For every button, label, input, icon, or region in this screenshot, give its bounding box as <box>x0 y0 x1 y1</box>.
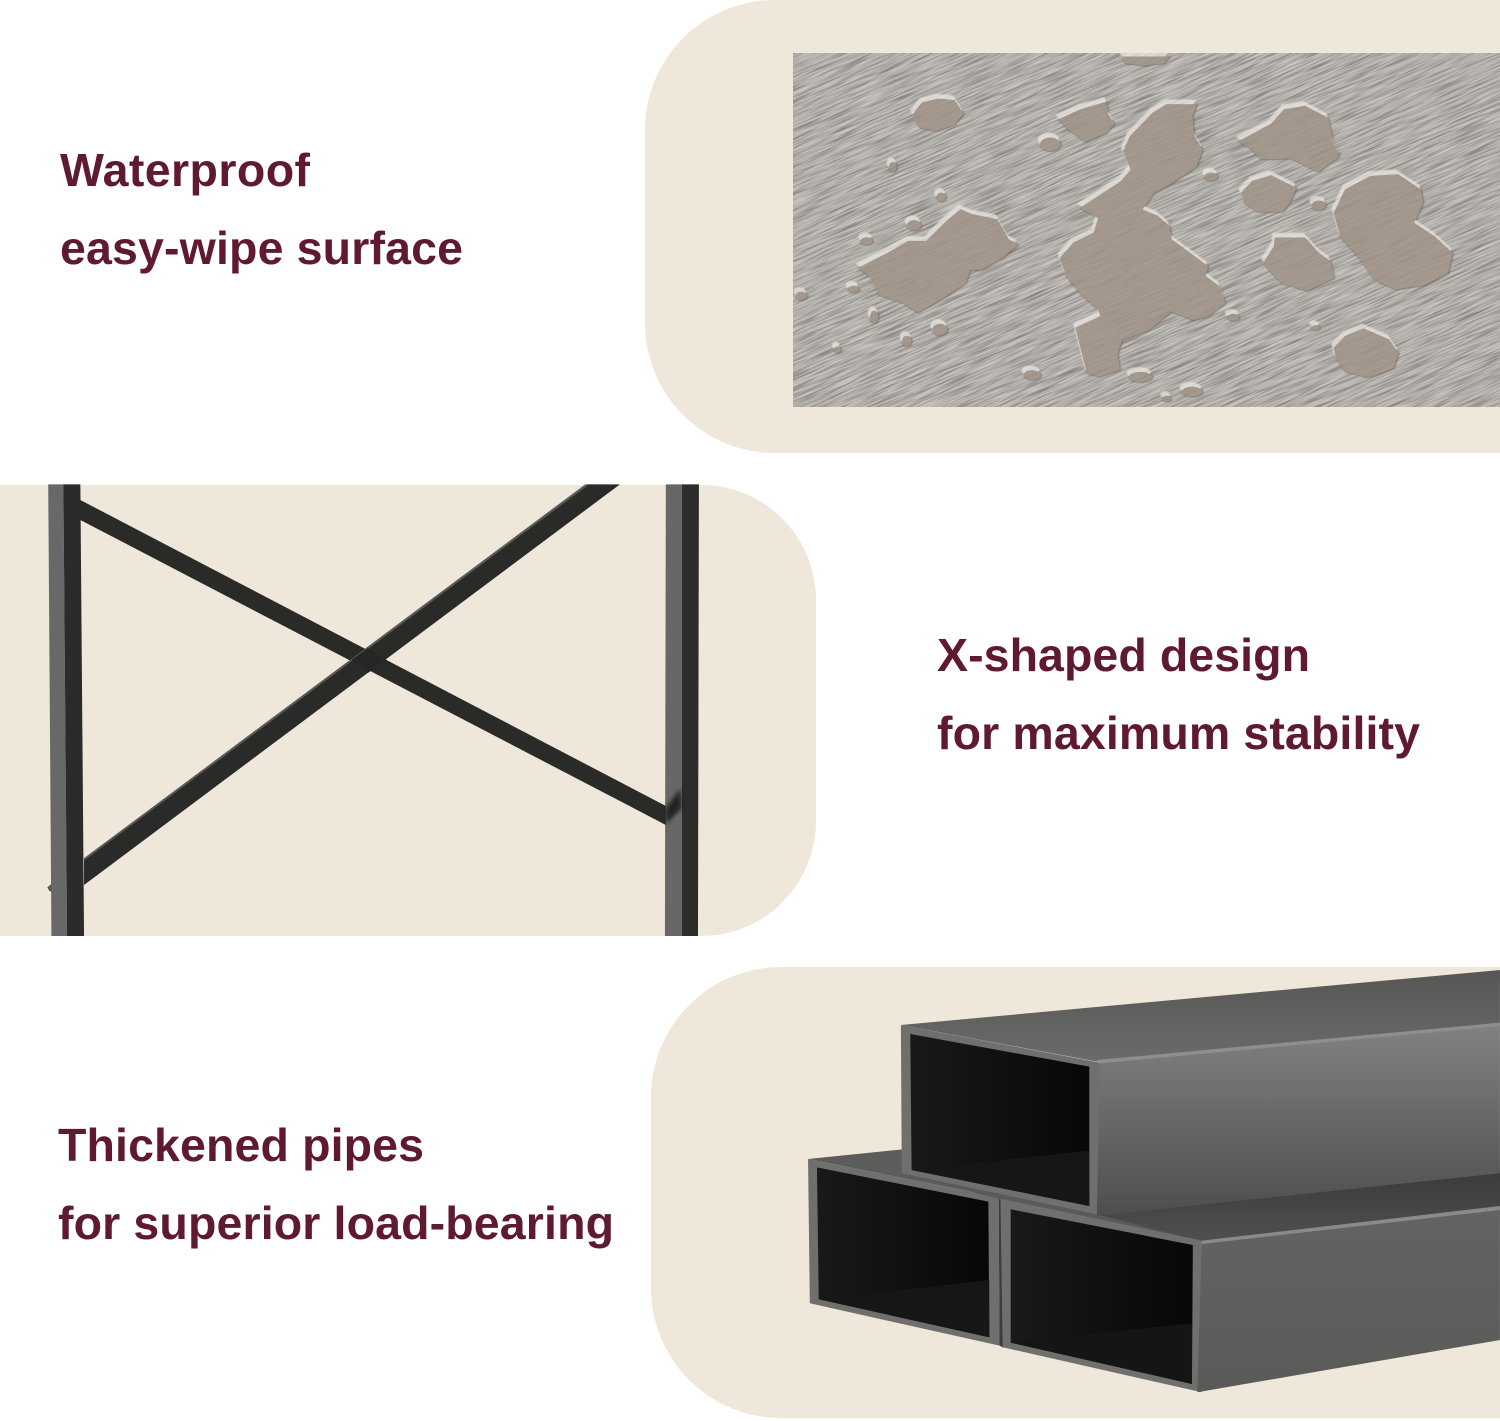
photo: water droplets on wood surface <box>793 53 1500 407</box>
heading: waterproof <box>60 144 463 274</box>
heading: thickened pipes: for superior load-bearing <box>58 1197 614 1249</box>
left post <box>47 484 84 936</box>
panel: X-shaped design <box>0 484 1420 936</box>
heading: X-shaped design: for maximum stability <box>937 707 1420 759</box>
droplet shadows <box>797 57 1452 401</box>
heading: X-shaped design <box>937 629 1420 759</box>
droplet bodies <box>796 57 1452 401</box>
lower right pipe <box>902 1170 1500 1392</box>
crossing point <box>351 648 387 673</box>
panel background: X-shaped <box>0 485 816 936</box>
heading: waterproof: Waterproof <box>60 144 310 196</box>
panel: thickened pipes <box>58 967 1500 1418</box>
right post <box>665 484 699 936</box>
panel background: waterproof <box>645 0 1500 453</box>
diagonal brace descending <box>80 500 666 825</box>
panel background: pipes <box>651 967 1500 1418</box>
heading: thickened pipes <box>58 1119 614 1249</box>
top pipe <box>901 970 1500 1216</box>
lower left pipe <box>808 1149 1004 1348</box>
heading: thickened pipes: Thickened pipes <box>58 1119 424 1171</box>
brace joint shadow <box>666 788 681 824</box>
heading: waterproof: easy-wipe surface <box>60 222 463 274</box>
droplet highlights <box>795 53 1450 397</box>
diagonal brace ascending <box>84 484 620 885</box>
illustration: stacked rectangular steel pipes <box>808 970 1500 1392</box>
panel: waterproof surface <box>60 0 1500 453</box>
illustration: X-shaped metal frame <box>47 484 699 936</box>
heading: X-shaped design: X-shaped design <box>937 629 1310 681</box>
